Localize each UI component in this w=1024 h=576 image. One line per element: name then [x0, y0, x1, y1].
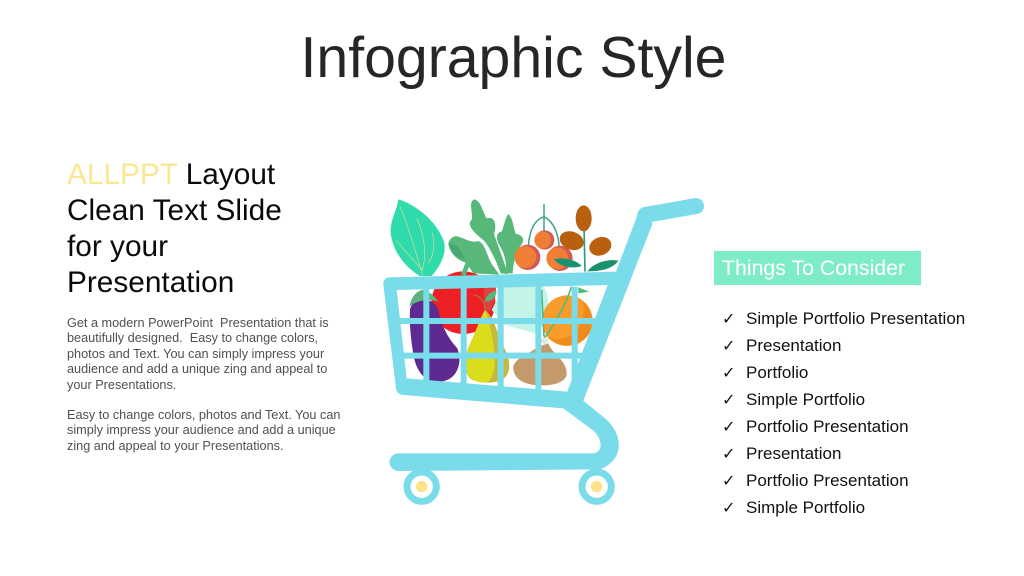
item 2: Presentation: [746, 336, 841, 355]
paragraph 1: audience and add a unique zing and appeal to: [67, 362, 327, 376]
left heading: Clean Text Slide: [67, 194, 282, 227]
paragraph 2: simply impress your audience and add a unique: [67, 423, 336, 437]
item 5: ✓: [722, 417, 735, 436]
title: Infographic Style: [300, 26, 726, 90]
groceries: [391, 199, 618, 385]
paragraph 2: [67, 408, 340, 453]
shopping cart illustration: [383, 198, 704, 505]
item 4: Simple Portfolio: [746, 390, 865, 409]
paragraph 1: Get a modern PowerPoint Presentation that is: [67, 316, 329, 330]
item 7: ✓: [722, 471, 735, 490]
nuts and sprig: [554, 205, 618, 272]
item 6: ✓: [722, 444, 735, 463]
paragraph 2: zing and appeal to your Presentations.: [67, 439, 284, 453]
checklist: [722, 309, 965, 517]
potato: [513, 343, 567, 385]
things to consider header: [714, 251, 921, 285]
item 7: Portfolio Presentation: [746, 471, 909, 490]
paragraph 1: [67, 316, 329, 392]
left heading: Presentation: [67, 266, 234, 299]
left wheel: [407, 472, 436, 501]
item 4: ✓: [722, 390, 735, 409]
paragraph 2: Easy to change colors, photos and Text. You can: [67, 408, 340, 422]
item 8: ✓: [722, 498, 735, 517]
item 8: Simple Portfolio: [746, 498, 865, 517]
cherries: [514, 204, 573, 271]
paragraph 1: beautifully designed. Easy to change colors,: [67, 331, 318, 345]
orange: [541, 287, 593, 346]
pear: [465, 291, 509, 383]
paragraph 1: photos and Text. You can simply impress your: [67, 347, 324, 361]
tomato: [431, 262, 496, 334]
paragraph 1: your Presentations.: [67, 378, 176, 392]
item 1: ✓: [722, 309, 735, 328]
left heading: ALLPPT Layout: [67, 158, 275, 191]
item 3: ✓: [722, 363, 735, 382]
item 1: Simple Portfolio Presentation: [746, 309, 965, 328]
cart frame and base: [383, 213, 653, 471]
item 5: Portfolio Presentation: [746, 417, 909, 436]
eggplant: [409, 290, 459, 382]
item 6: Presentation: [746, 444, 841, 463]
handle: [645, 206, 696, 215]
left heading: [67, 158, 282, 299]
left heading: for your: [67, 230, 168, 263]
right wheel: [582, 472, 611, 501]
bag: [492, 287, 548, 353]
cart grid: [397, 287, 600, 392]
item 3: Portfolio: [746, 363, 808, 382]
leaf: [391, 199, 445, 276]
greens: [448, 199, 523, 275]
item 2: ✓: [722, 336, 735, 355]
things to consider header: Things To Consider: [722, 256, 905, 280]
